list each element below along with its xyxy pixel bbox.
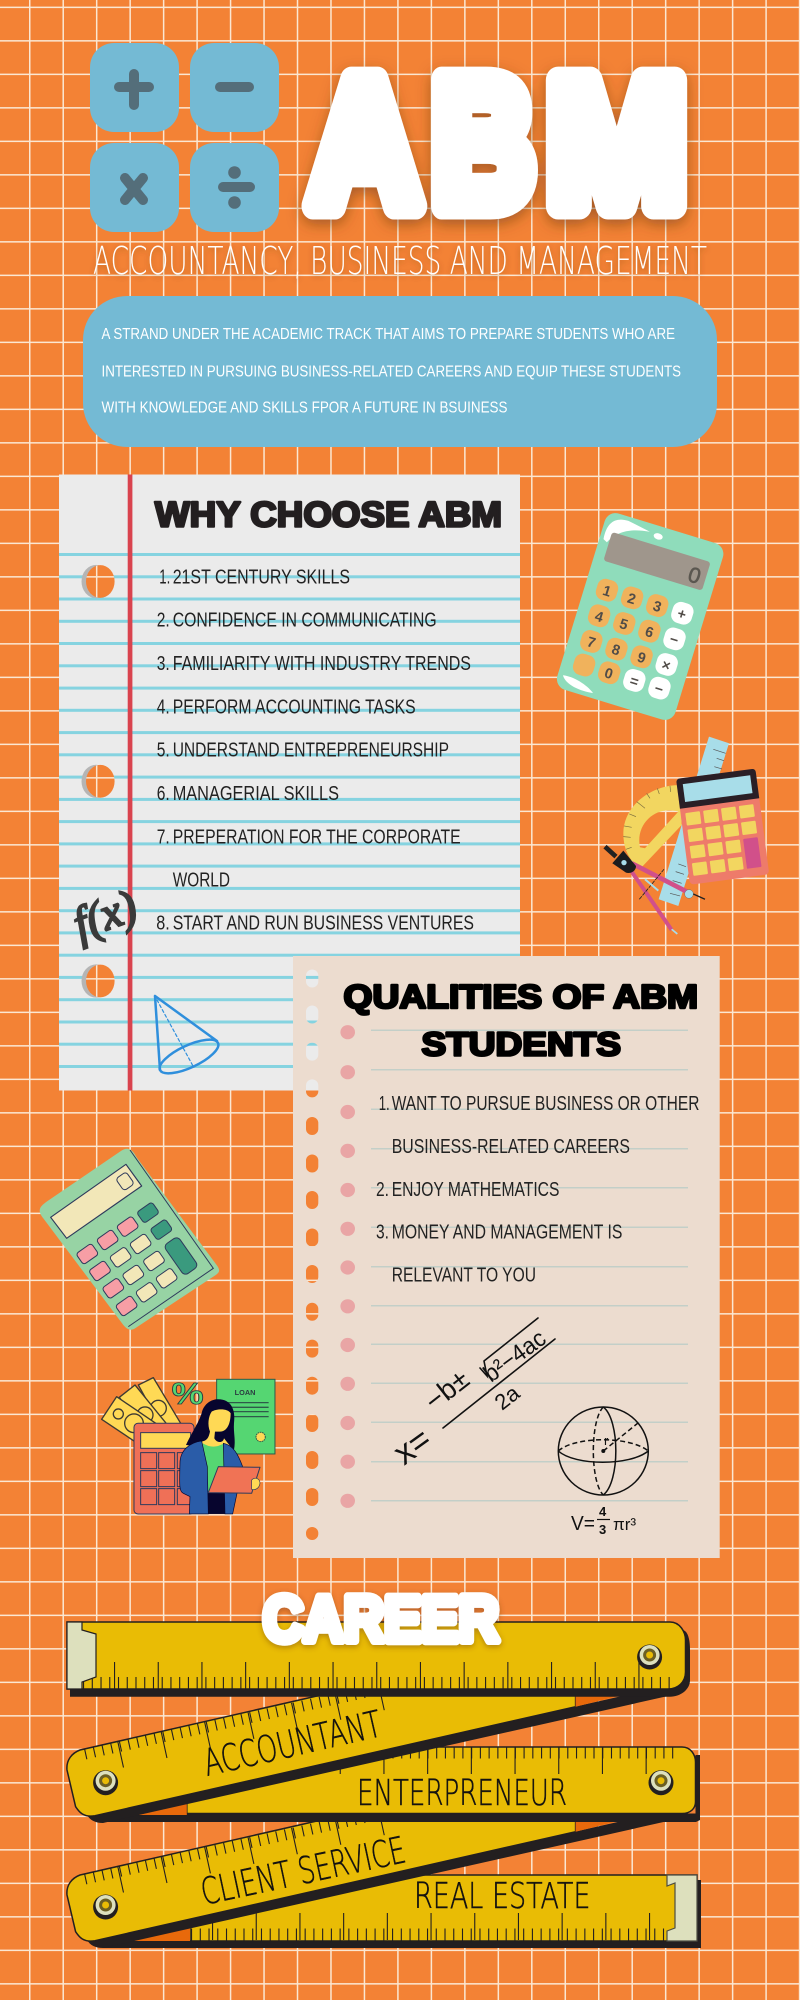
list: reasons: START AND RUN BUSINESS VENTURES — [173, 912, 474, 934]
tile: multiply — [90, 143, 179, 232]
list: reasons: 6. — [157, 783, 170, 805]
panel: why choose ABM — [59, 474, 520, 1090]
sphere volume formula: πr³ — [613, 1515, 636, 1534]
list: qualities: 1. — [379, 1093, 390, 1115]
title: ABM: M — [547, 40, 686, 245]
list: reasons: 1. — [159, 566, 170, 588]
list: reasons: 3. — [157, 653, 170, 675]
list: reasons: 2. — [157, 610, 170, 632]
tile: minus — [190, 43, 279, 132]
list: reasons: UNDERSTAND ENTREPRENEURSHIP — [173, 740, 449, 762]
heading: why choose ABM: WHY CHOOSE ABM — [155, 496, 502, 534]
icon: green calculator: 3 — [651, 598, 663, 616]
list: reasons: 4. — [157, 696, 170, 718]
calculator keys — [571, 577, 670, 694]
list: reasons: 21ST CENTURY SKILLS — [173, 566, 350, 588]
heading: qualities of ABM students: STUDENTS — [422, 1026, 621, 1062]
list: reasons: FAMILIARITY WITH INDUSTRY TRENDS — [173, 653, 471, 675]
list: qualities: RELEVANT TO YOU — [392, 1264, 536, 1286]
icon: f(x): f(x) — [66, 880, 143, 949]
icon: green calculator: − — [667, 631, 680, 649]
definition text: A STRAND UNDER THE ACADEMIC TRACK THAT AIMS TO PREPARE STUDENTS WHO ARE — [102, 326, 675, 343]
panel: qualities of ABM students — [293, 956, 720, 1558]
calculator screen — [603, 532, 711, 591]
pink calculator — [676, 769, 769, 885]
loan document: LOAN — [235, 1388, 255, 1397]
list: reasons: WORLD — [173, 869, 230, 891]
sphere volume formula: V= — [571, 1513, 595, 1535]
list: qualities — [376, 1093, 699, 1286]
career label: enterpreneur: ENTERPRENEUR — [357, 1773, 567, 1814]
definition text: INTERESTED IN PURSUING BUSINESS-RELATED CAREERS AND EQUIP THESE STUDENTS — [102, 364, 681, 380]
list: reasons — [156, 566, 474, 934]
icon: sphere: r — [604, 1433, 609, 1448]
list: qualities: WANT TO PURSUE BUSINESS OR OTHER — [392, 1093, 699, 1115]
icon: green calculator: − — [652, 681, 665, 699]
list: reasons: PERFORM ACCOUNTING TASKS — [173, 696, 416, 718]
career label: client service: CLIENT SERVICE — [197, 1828, 409, 1914]
list: reasons: PREPERATION FOR THE CORPORATE — [173, 826, 461, 848]
icon: green calculator: 2 — [625, 591, 638, 608]
calculator — [134, 1423, 194, 1514]
icon: mint calculator — [40, 1149, 219, 1330]
list: reasons: CONFIDENCE IN COMMUNICATING — [173, 610, 437, 632]
icon: green calculator: 8 — [610, 642, 622, 659]
icon: green calculator: 5 — [617, 616, 630, 634]
list: qualities: ENJOY MATHEMATICS — [392, 1179, 559, 1201]
icon: green calculator: 9 — [635, 650, 647, 667]
panel: definition — [83, 296, 717, 447]
icon: green calculator: 0 — [685, 562, 704, 589]
protractor — [623, 783, 682, 867]
icon: woman with loan, calculator and money — [102, 1377, 275, 1514]
loan document — [217, 1379, 275, 1454]
icon: quadratic formula: b²−4ac — [479, 1325, 551, 1388]
list: qualities: MONEY AND MANAGEMENT IS — [392, 1222, 622, 1244]
icon: sphere — [558, 1407, 648, 1537]
icon: green calculator: × — [660, 657, 672, 675]
tile: plus — [90, 43, 179, 132]
ruler: real estate — [97, 1875, 701, 1948]
icon: quadratic formula: 2a — [490, 1380, 525, 1415]
icon: green calculator: 6 — [643, 624, 655, 642]
career label: accountant: ACCOUNTANT — [199, 1702, 385, 1785]
percent sign: % — [172, 1377, 204, 1411]
icon: quadratic formula: x= — [386, 1420, 439, 1472]
tile: divide — [190, 143, 279, 232]
ruler — [659, 737, 729, 906]
title: career: CAREER — [263, 1583, 499, 1655]
list: reasons: 5. — [157, 740, 170, 762]
icon: green calculator: 0 — [602, 665, 615, 683]
sphere volume formula — [571, 1504, 636, 1537]
panel: career rulers — [67, 1622, 701, 1948]
icon: green calculator — [554, 510, 726, 723]
heading: qualities of ABM students: QUALITIES OF ABM — [344, 978, 698, 1015]
list: reasons: 8. — [156, 912, 170, 934]
money bills — [102, 1378, 181, 1442]
icon: geometry tools and calculator — [605, 737, 769, 934]
ruler: enterpreneur — [96, 1747, 700, 1822]
icon: cone — [155, 996, 223, 1080]
list: reasons: 7. — [157, 826, 170, 848]
ruler: top — [67, 1622, 690, 1697]
list: qualities: 3. — [376, 1222, 389, 1244]
woman — [180, 1399, 260, 1514]
calculator highlights — [559, 515, 664, 700]
title: ABM: B — [432, 40, 534, 245]
title: ABM — [309, 40, 686, 245]
definition text — [102, 326, 681, 416]
ruler: client service — [67, 1813, 668, 1948]
list: reasons: MANAGERIAL SKILLS — [173, 783, 339, 805]
icon: green calculator: 4 — [593, 609, 605, 626]
ruler: accountant — [67, 1688, 668, 1823]
title: ABM: A — [309, 40, 420, 245]
icon: green calculator: + — [675, 606, 688, 624]
definition text: WITH KNOWLEDGE AND SKILLS FPOR A FUTURE IN BSUINESS — [102, 400, 508, 416]
icon: quadratic formula — [386, 1318, 555, 1472]
icon: green calculator: 7 — [585, 634, 597, 652]
margin line — [128, 474, 132, 1090]
sphere volume formula: 4 — [599, 1504, 607, 1519]
list: qualities: 2. — [376, 1179, 389, 1201]
icon: quadratic formula: −b± — [419, 1363, 475, 1417]
icon: math operator tiles — [90, 43, 279, 232]
icon: green calculator: 1 — [601, 583, 613, 601]
sphere volume formula: 3 — [599, 1522, 606, 1537]
compass — [605, 847, 705, 934]
career label: real estate: REAL ESTATE — [414, 1876, 590, 1917]
list: qualities: BUSINESS-RELATED CAREERS — [392, 1136, 630, 1158]
paper with punched holes — [293, 956, 720, 1558]
icon: green calculator: = — [628, 673, 640, 691]
heading: qualities of ABM students — [344, 978, 698, 1062]
